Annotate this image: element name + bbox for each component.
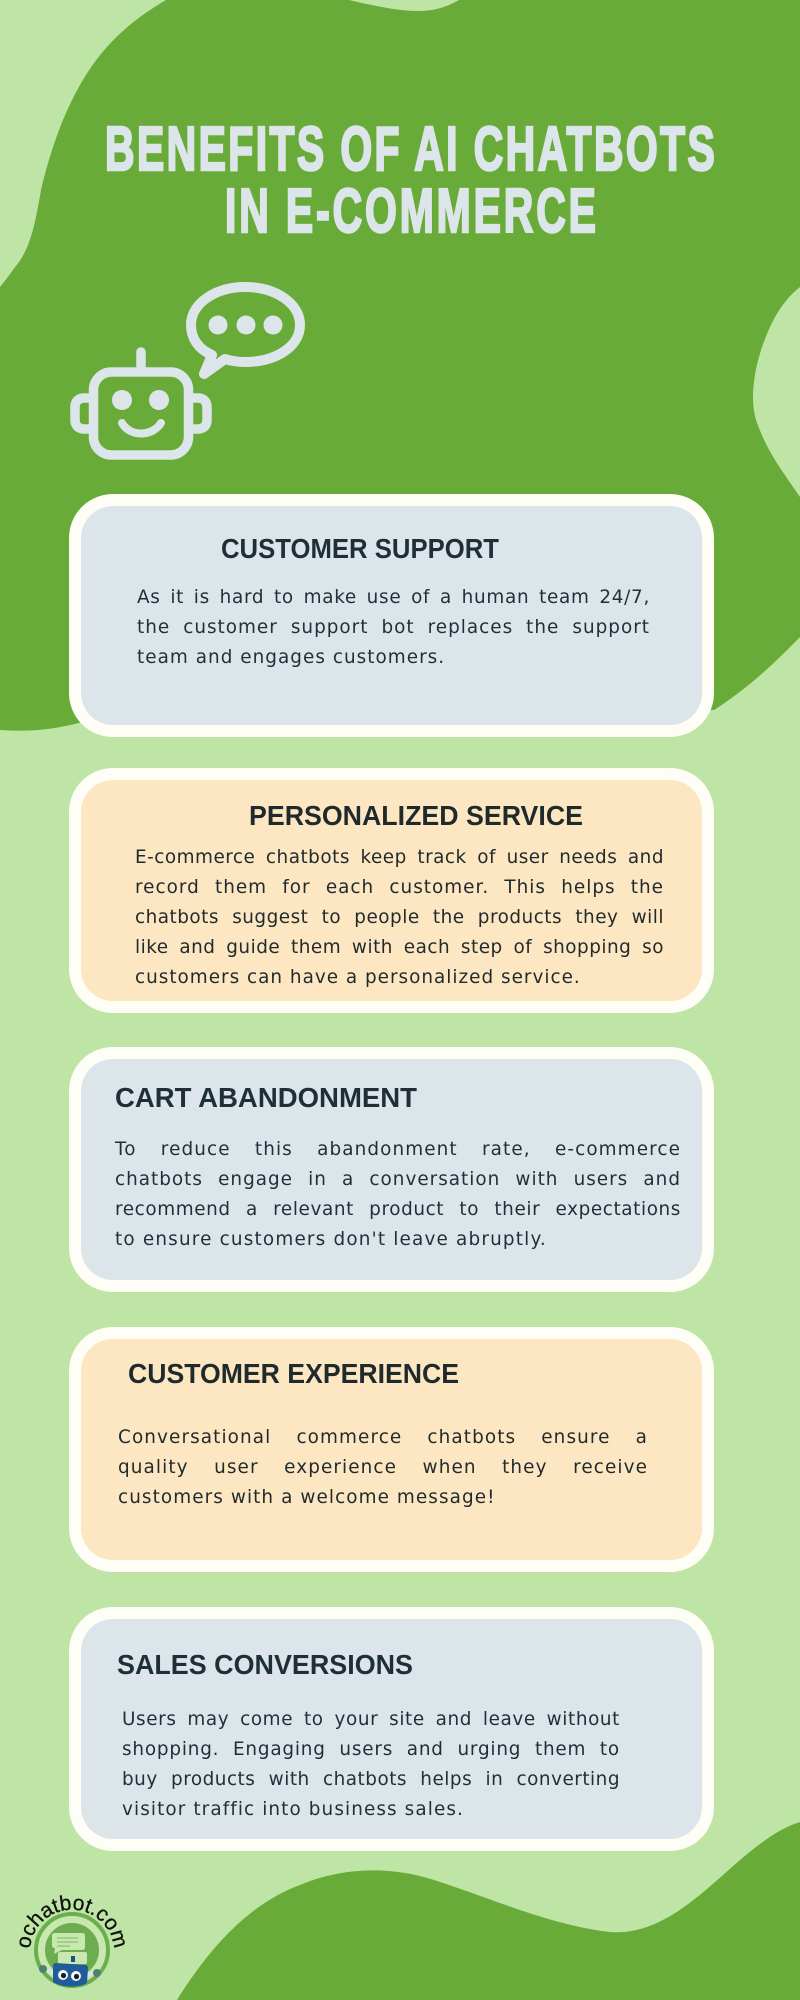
robot head — [94, 372, 188, 455]
text: customer support: the customer support bot replaces the support — [137, 617, 650, 638]
text: personalized service: record them for each customer. This helps the — [135, 877, 664, 898]
logo wordmark — [30, 1910, 114, 1966]
panel: personalized service — [69, 768, 714, 1013]
panel: customer experience — [69, 1327, 714, 1572]
text: customer support — [137, 587, 650, 668]
text: personalized service: customers can have a personalized service. — [135, 967, 581, 988]
logo robot — [39, 1956, 101, 1987]
icon: robot with speech bubble — [70, 282, 305, 460]
logo: ochatbot.com: ochatbot.com — [19, 1895, 125, 1948]
text: customer experience: customers with a welcome message! — [118, 1487, 496, 1508]
panel: cart abandonment — [69, 1047, 714, 1292]
bottom dark green blob — [177, 1822, 800, 2000]
text: personalized service: E-commerce chatbots keep track of user needs and — [135, 847, 664, 868]
text: cart abandonment: recommend a relevant product to their expectations — [115, 1199, 681, 1220]
heading: personalized service: PERSONALIZED SERVICE — [249, 800, 583, 831]
text: cart abandonment — [114, 1139, 681, 1250]
text: sales conversions: buy products with chatbots helps in converting — [122, 1769, 620, 1790]
title — [105, 115, 715, 246]
text: cart abandonment: To reduce this abandonment rate, e-commerce — [115, 1139, 681, 1160]
text: personalized service — [135, 847, 664, 988]
text: sales conversions: shopping. Engaging users and urging them to — [122, 1739, 620, 1760]
heading: sales conversions: SALES CONVERSIONS — [117, 1649, 413, 1680]
heading: customer support: CUSTOMER SUPPORT — [221, 533, 499, 564]
text: customer experience: Conversational commerce chatbots ensure a — [118, 1427, 648, 1448]
text: personalized service: like and guide them with each step of shopping so — [135, 937, 664, 958]
text: customer support: As it is hard to make use of a human team 24/7, — [137, 587, 650, 608]
text: customer experience — [118, 1427, 648, 1508]
text: personalized service: chatbots suggest to people the products they will — [135, 907, 664, 928]
logo chat bubbles — [52, 1933, 87, 1964]
panel: customer support — [69, 494, 714, 737]
speech bubble — [191, 287, 300, 374]
text: sales conversions — [122, 1709, 620, 1820]
text: sales conversions: Users may come to your site and leave without — [122, 1709, 620, 1730]
text: sales conversions: visitor traffic into business sales. — [122, 1799, 464, 1820]
title: IN E-COMMERCE — [225, 177, 596, 246]
top dark green blob — [0, 0, 800, 731]
text: customer support: team and engages customers. — [137, 647, 445, 668]
text: cart abandonment: chatbots engage in a conversation with users and — [115, 1169, 681, 1190]
panel: sales conversions — [69, 1607, 714, 1851]
text: customer experience: quality user experience when they receive — [118, 1457, 648, 1478]
title: BENEFITS OF AI CHATBOTS — [105, 115, 715, 184]
text: cart abandonment: to ensure customers don't leave abruptly. — [115, 1229, 547, 1250]
heading: customer experience: CUSTOMER EXPERIENCE — [128, 1358, 459, 1389]
heading: cart abandonment: CART ABANDONMENT — [115, 1082, 417, 1113]
